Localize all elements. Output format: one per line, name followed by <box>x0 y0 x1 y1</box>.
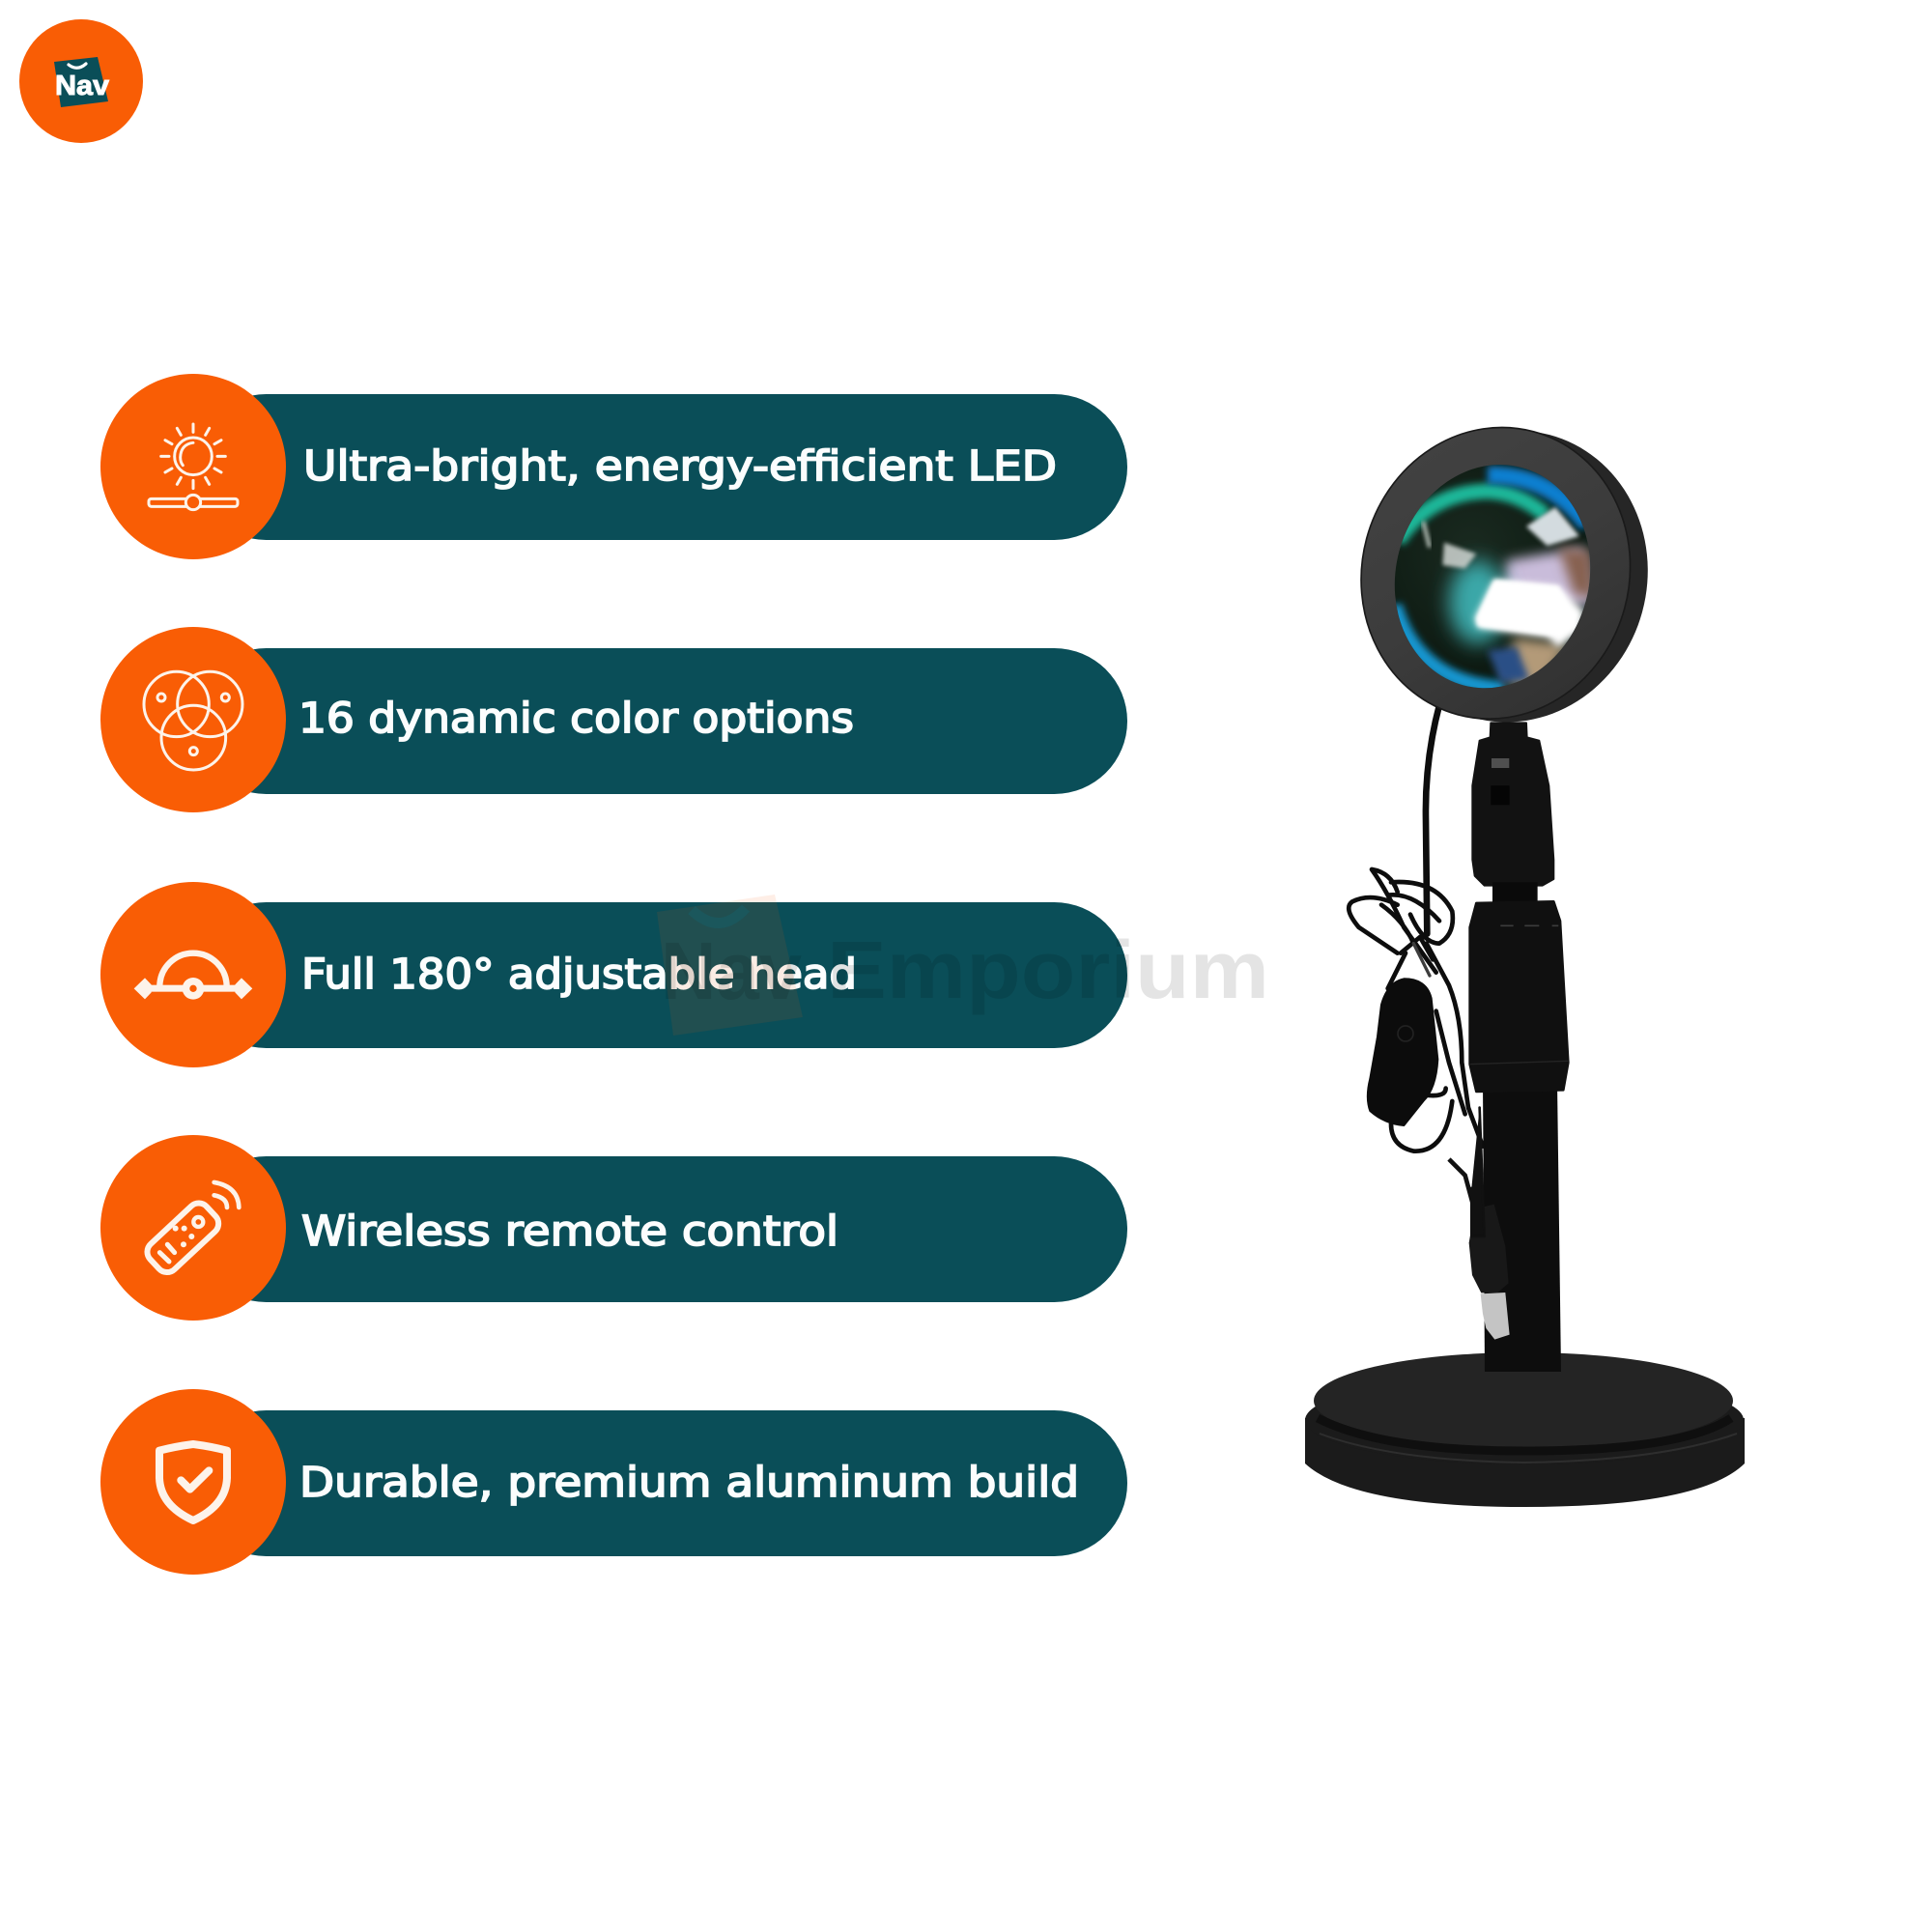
usb plug <box>1449 1159 1510 1340</box>
label: remote: Wireless remote control <box>301 1208 838 1256</box>
icon: sun and slider <box>149 424 238 510</box>
lens <box>1395 465 1590 688</box>
label: LED: Ultra-bright, energy-efficient LED <box>303 442 1057 491</box>
feature row: adjustable head <box>100 882 1127 1067</box>
lamp pole <box>1483 1082 1561 1372</box>
feature row: build <box>100 1389 1127 1575</box>
watermark: Emporium <box>827 924 1269 1015</box>
icon: overlapping color circles <box>144 671 242 770</box>
logo badge <box>19 19 143 143</box>
icon: shield with check <box>159 1444 227 1520</box>
feature row: colors <box>100 627 1127 812</box>
head rear shell <box>1344 400 1680 753</box>
watermark <box>657 895 1269 1036</box>
icon: remote control <box>143 1182 239 1277</box>
label: build: Durable, premium aluminum build <box>299 1459 1079 1507</box>
logo badge: Nav <box>55 71 109 101</box>
lamp base <box>1305 1352 1745 1507</box>
lamp collar and tilt joint <box>1470 723 1568 1092</box>
watermark: Nav <box>661 925 802 1016</box>
label: colors: 16 dynamic color options <box>298 695 854 743</box>
head front ring <box>1328 397 1662 750</box>
lamp head <box>1360 427 1648 723</box>
power cord and inline switch <box>1349 705 1485 1236</box>
feature row: remote <box>100 1135 1127 1321</box>
infographic canvas <box>19 19 1745 1575</box>
icon: 180 degree protractor <box>134 953 252 1000</box>
label: adjustable head: Full 180° adjustable head <box>301 951 857 999</box>
feature row: LED <box>100 374 1127 559</box>
product photo: sunset lamp <box>1305 397 1745 1507</box>
